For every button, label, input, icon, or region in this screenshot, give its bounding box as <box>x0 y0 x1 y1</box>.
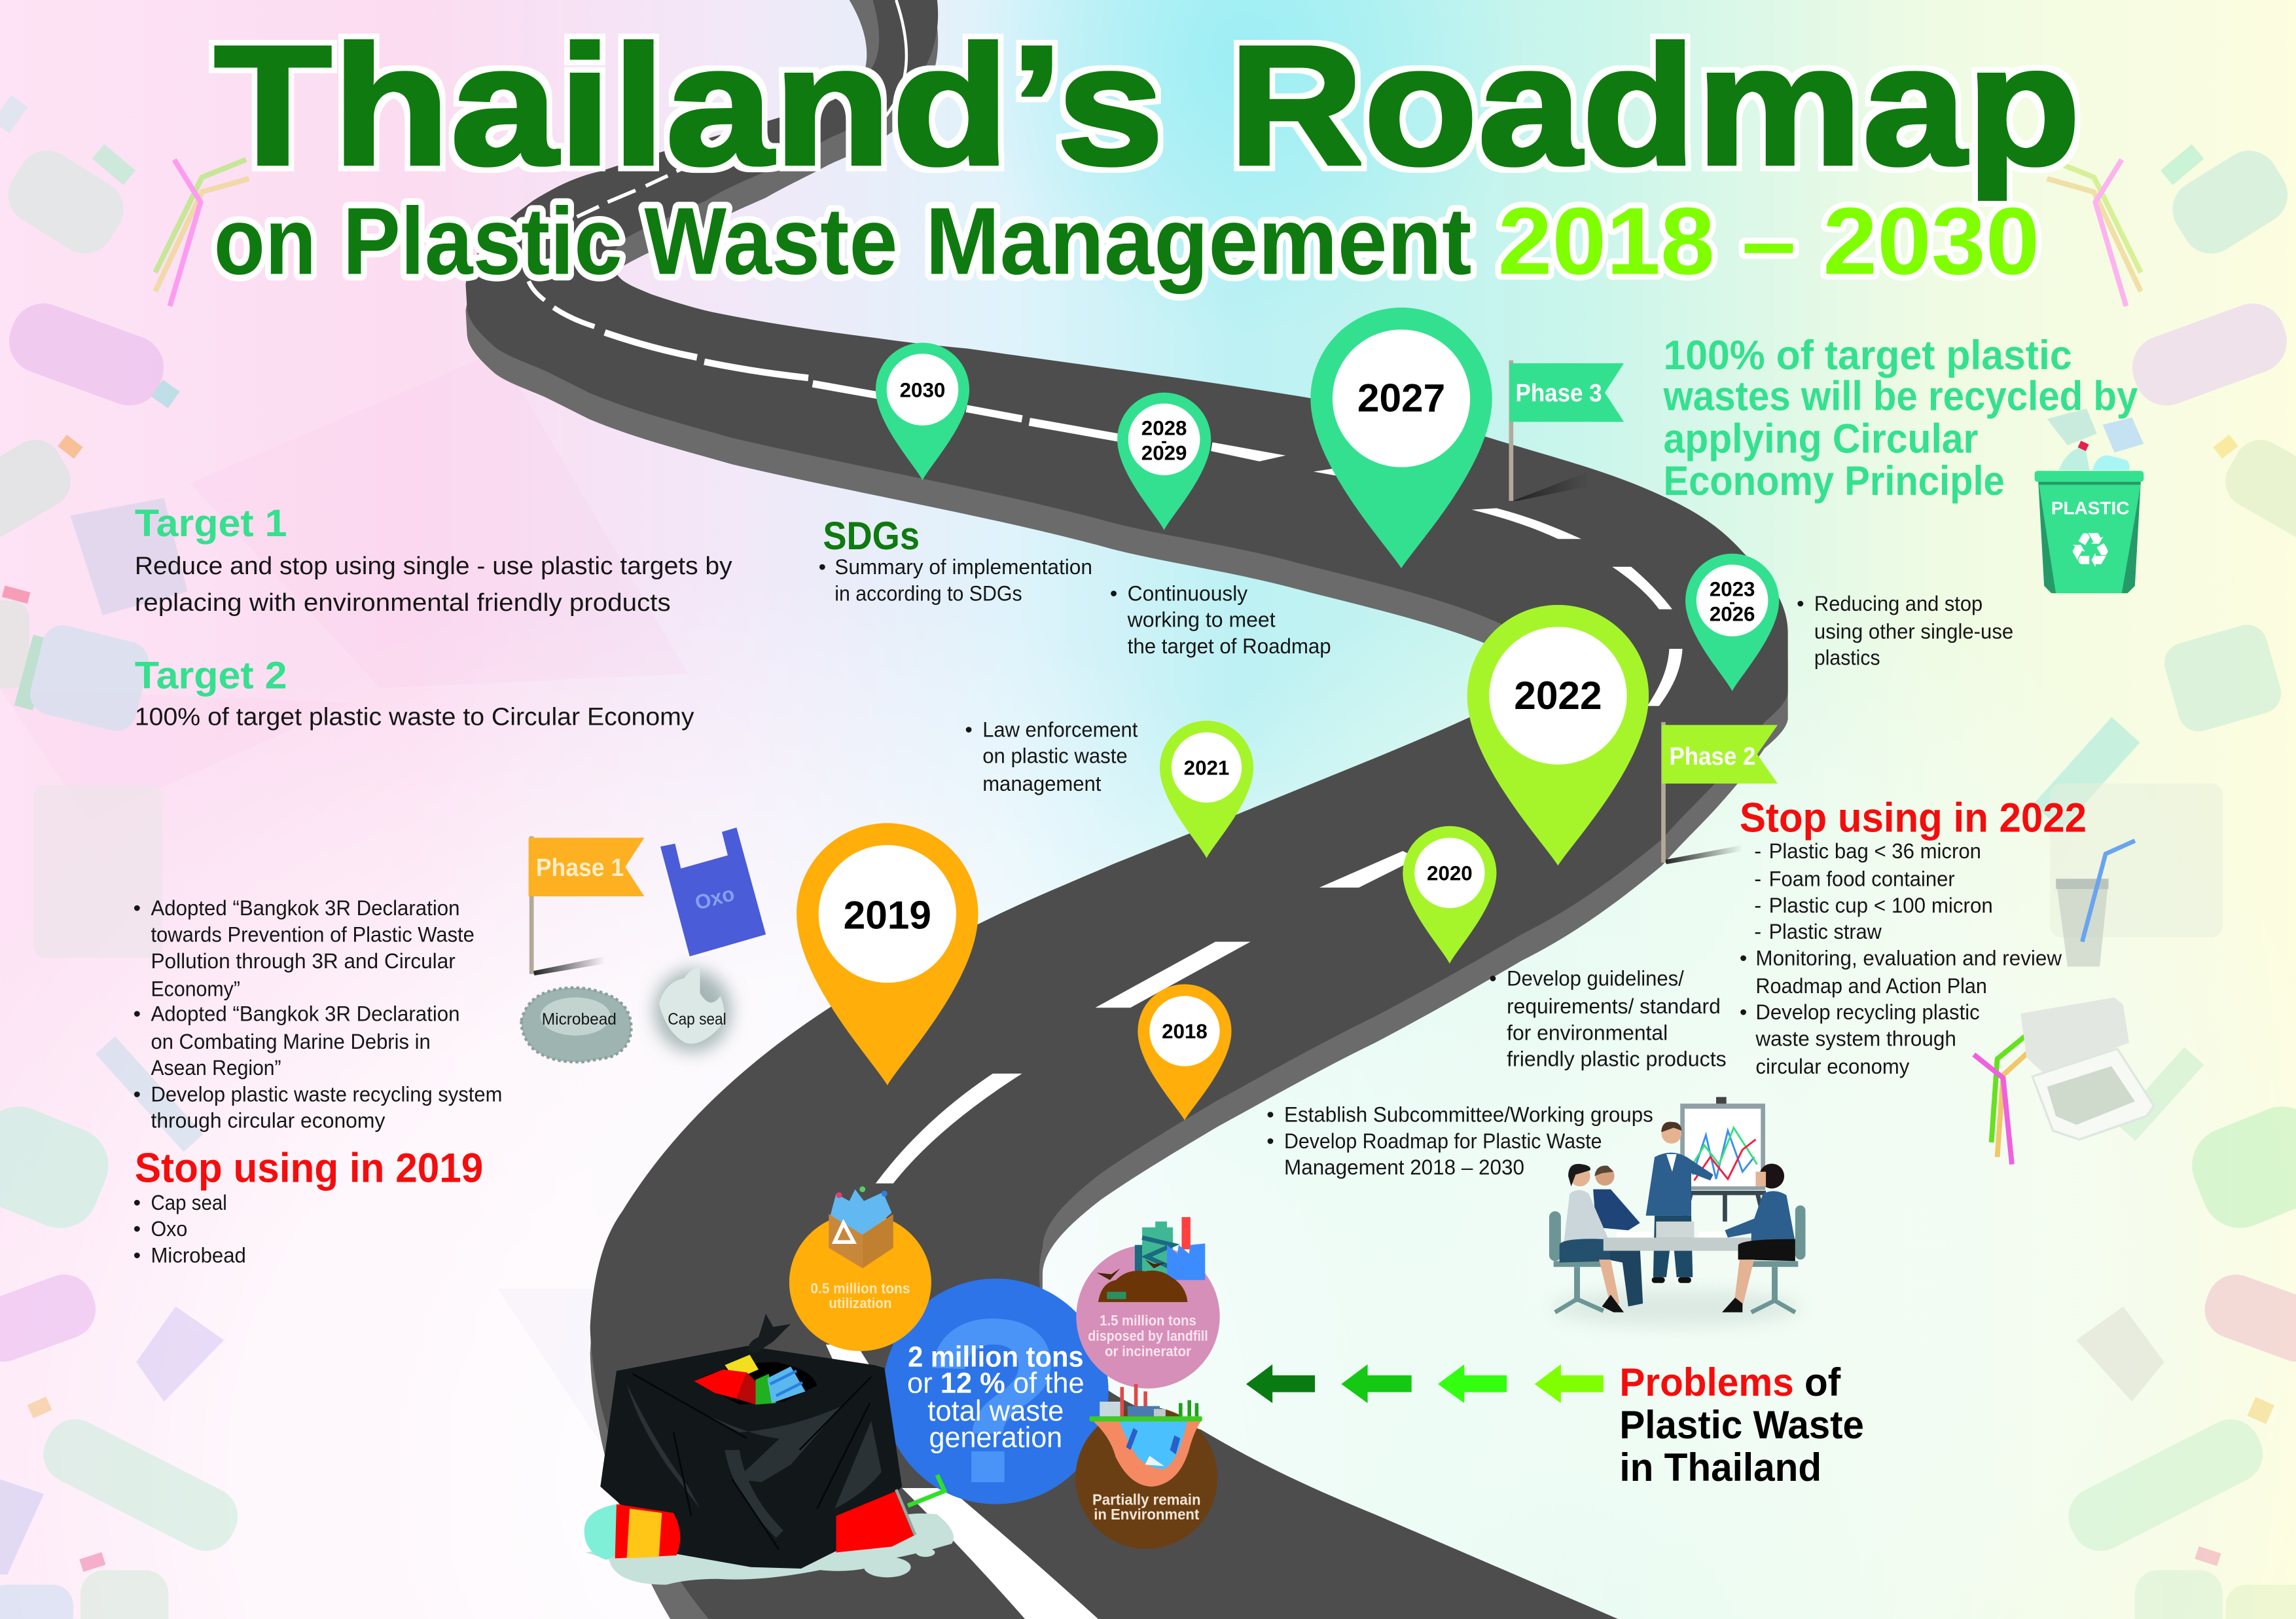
pin 2020 <box>1403 826 1496 964</box>
orange circle: utilization: 0.5 million tons <box>810 1280 910 1296</box>
text block: 2019 actions: on Combating Marine Debris in <box>151 1029 431 1053</box>
text block: stop using in 2022: • <box>1740 945 1747 970</box>
blue circle: 2 million tons: generation <box>929 1421 1062 1453</box>
icon: plastic recycling bin: ♻ <box>2069 522 2112 579</box>
arrow 4 <box>1535 1364 1604 1403</box>
text block: 2023-2026 actions <box>1797 591 2013 670</box>
text block: 2028-2029 actions: working to meet <box>1127 608 1276 632</box>
text block: 2020 actions: Develop guidelines/ <box>1507 966 1685 991</box>
flag: phase 2 <box>1661 722 1778 864</box>
title line 1 <box>214 10 2081 201</box>
text block: 2023-2026 actions: Reducing and stop <box>1814 591 1982 615</box>
pin 2027 <box>1310 308 1492 568</box>
text block: stop using in 2022: circular economy <box>1755 1054 1910 1078</box>
text block: 2021 actions: on plastic waste <box>982 744 1128 768</box>
text block: targets <box>135 502 732 731</box>
faded capsule left <box>0 295 180 414</box>
orange circle: utilization: utilization <box>829 1295 891 1311</box>
flag: phase 3: Phase 3 <box>1516 380 1602 407</box>
flag: phase 3 <box>1509 360 1624 501</box>
text block: 2028-2029 actions: Continuously <box>1128 581 1248 605</box>
pin 2028-2029: 2028 <box>1141 416 1187 439</box>
text block: 2021 actions: management <box>982 771 1101 795</box>
presenter <box>1646 1121 1713 1283</box>
icon: polluted pit and factory <box>1090 1384 1202 1487</box>
icon: microbead pile: Microbead <box>542 1011 617 1028</box>
text block: stop using in 2019: Microbead <box>151 1243 246 1267</box>
text block: 2020 actions: friendly plastic products <box>1507 1047 1727 1071</box>
pin 2028-2029: - <box>1161 431 1167 450</box>
text block: 2019 actions <box>134 896 502 1133</box>
text block: stop using in 2022: - <box>1754 867 1761 891</box>
pin 2018 <box>1138 984 1232 1120</box>
blue circle: 2 million tons: total waste <box>927 1394 1064 1427</box>
icon: faded cup with blue straw <box>2056 841 2135 967</box>
road surface <box>465 0 1788 1619</box>
text block: 2021 actions: Law enforcement <box>982 717 1138 741</box>
pink circle: landfill: 1.5 million tons <box>1100 1313 1196 1329</box>
icon: plastic recycling bin: PLASTIC <box>2051 498 2129 518</box>
text block: stop using in 2022: Stop using in 2022 <box>1740 795 2087 841</box>
heading: problems of plastic waste <box>1619 1360 1864 1489</box>
icon: plastic recycling bin <box>2035 409 2144 593</box>
brown circle: remains in environment <box>1075 1384 1217 1549</box>
icon: oxo plastic bag <box>660 828 766 956</box>
text block: stop using in 2022: Develop recycling plastic <box>1755 1000 1980 1024</box>
icon: oxo plastic bag: Oxo <box>692 882 737 915</box>
text block: 2020 actions <box>1489 966 1727 1071</box>
target 2: Target 2 <box>135 654 287 697</box>
brown circle: remains in environment: Partially remain <box>1092 1491 1201 1508</box>
text block: stop using in 2022: - <box>1754 893 1761 917</box>
title line 2: Plastic <box>343 187 622 294</box>
pin 2023-2026 <box>1685 554 1779 691</box>
arrow 2 <box>1341 1364 1412 1403</box>
text block: targets: 100% of target plastic waste to Circular Economy <box>135 703 694 731</box>
faded plastic waste pattern left <box>0 95 248 1619</box>
pin 2023-2026: 2023 <box>1710 578 1755 601</box>
text block: 2018 actions: Management 2018 – 2030 <box>1284 1155 1524 1179</box>
icon: colored straws right <box>1974 1032 2036 1165</box>
road centre dashes <box>529 0 1683 1619</box>
text block: targets: replacing with environmental friendly products <box>135 589 671 617</box>
road side wall <box>465 26 1788 1619</box>
seated man <box>1593 1166 1643 1307</box>
text block: stop using in 2019: Cap seal <box>151 1190 227 1214</box>
flag: phase 2: Phase 2 <box>1669 743 1755 771</box>
text block: stop using in 2022: - <box>1754 919 1761 943</box>
text block: SDGs: Summary of implementation <box>834 555 1092 579</box>
heading: problems of plastic waste: Plastic Waste <box>1619 1402 1864 1447</box>
text block: 2019 actions: Adopted “Bangkok 3R Declaration <box>151 896 460 920</box>
icon: cap seal: Cap seal <box>668 1011 726 1028</box>
arrows <box>1246 1364 1604 1403</box>
title line 1: Thailand’s <box>214 10 1164 200</box>
text block: stop using in 2019: • <box>134 1216 141 1241</box>
pink circle: landfill: disposed by landfill <box>1088 1328 1208 1344</box>
orange circle: utilization <box>789 1186 931 1351</box>
heading: circular economy target: applying Circular <box>1663 416 1978 462</box>
text block: stop using in 2022: Monitoring, evaluation and review <box>1755 945 2062 970</box>
illustration: meeting at presentation board <box>1549 1097 1806 1327</box>
pin 2027: 2027 <box>1357 376 1445 420</box>
text block: 2023-2026 actions: • <box>1797 591 1804 615</box>
text block: stop using in 2019: Oxo <box>151 1216 187 1241</box>
text block: 2020 actions: requirements/ standard <box>1507 994 1721 1018</box>
text block: stop using in 2022: - <box>1754 839 1761 863</box>
text block: stop using in 2019 <box>134 1145 483 1267</box>
flag: phase 1 <box>529 836 644 975</box>
brown circle: remains in environment: in Environment <box>1094 1506 1200 1523</box>
faded bottle top left <box>0 139 135 264</box>
text block: stop using in 2022: Foam food container <box>1769 867 1955 891</box>
left chair <box>1549 1211 1604 1313</box>
heading: problems of plastic waste: in Thailand <box>1619 1445 1821 1489</box>
pin 2019 <box>797 823 978 1085</box>
arrow 1 <box>1246 1364 1315 1403</box>
text block: 2021 actions <box>965 717 1138 795</box>
text block: stop using in 2022: • <box>1740 1000 1747 1024</box>
text block: 2028-2029 actions: • <box>1110 581 1117 605</box>
text block: SDGs: in according to SDGs <box>834 581 1022 605</box>
bag folds <box>627 1384 882 1538</box>
arrow 3 <box>1438 1364 1507 1403</box>
blue circle: 2 million tons <box>883 1270 1109 1532</box>
text block: stop using in 2022: Plastic bag < 36 micron <box>1769 839 1981 863</box>
text block: 2018 actions: Establish Subcommittee/Working groups <box>1284 1102 1653 1127</box>
text block: 2018 actions: Develop Roadmap for Plastic Waste <box>1284 1129 1602 1153</box>
text block: 2023-2026 actions: using other single-use <box>1814 619 2013 643</box>
icon: cap seal <box>655 967 730 1051</box>
text block: 2019 actions: through circular economy <box>151 1108 386 1133</box>
pin 2021: 2021 <box>1184 756 1229 779</box>
faded bottle with orange cap <box>0 430 83 548</box>
pin 2023-2026: - <box>1729 592 1735 611</box>
winding road <box>465 0 1788 1619</box>
text block: 2019 actions: Develop plastic waste recycling system <box>151 1082 502 1106</box>
text block: 2019 actions: Pollution through 3R and Circular <box>151 949 456 973</box>
pin 2028-2029: 2029 <box>1141 441 1187 464</box>
text block: 2020 actions: • <box>1489 966 1497 991</box>
text block: targets: Reduce and stop using single - use plastic targets by <box>135 553 732 580</box>
pin 2019: 2019 <box>844 892 931 937</box>
blue circle: 2 million tons: or 12 % of the <box>907 1367 1085 1400</box>
text block: 2019 actions: • <box>134 1082 141 1106</box>
icon: food container <box>2020 998 2154 1140</box>
title line 2: on <box>214 187 316 294</box>
right chair <box>1751 1205 1806 1313</box>
text block: stop using in 2019: • <box>134 1190 141 1214</box>
blue circle: 2 million tons: 2 million tons <box>908 1340 1084 1373</box>
pin 2023-2026: 2026 <box>1710 603 1755 626</box>
text block: SDGs <box>819 513 1092 605</box>
text block: 2019 actions: • <box>134 1001 141 1025</box>
bag body <box>600 1346 902 1569</box>
flag: phase 1: Phase 1 <box>536 854 624 882</box>
title line 2 <box>214 187 1471 294</box>
text block: 2023-2026 actions: plastics <box>1814 646 1880 670</box>
heading: problems of plastic waste: Problems of <box>1619 1360 1841 1404</box>
pin 2022 <box>1467 605 1649 865</box>
question mark watermark: ? <box>922 1270 1064 1532</box>
text block: 2018 actions <box>1266 1102 1653 1179</box>
text block: 2019 actions: Asean Region” <box>151 1055 281 1080</box>
heading: circular economy target: Economy Principle <box>1663 458 2005 504</box>
text block: stop using in 2019: • <box>134 1243 141 1267</box>
pin 2021 <box>1160 721 1253 858</box>
heading: circular economy target: wastes will be recycled by <box>1663 373 2138 419</box>
title line 2: Waste <box>644 187 897 294</box>
icon: box of bottles <box>829 1186 893 1268</box>
text block: 2018 actions: • <box>1266 1102 1274 1127</box>
target 1: Target 1 <box>135 502 287 545</box>
bag opening with waste <box>694 1355 817 1404</box>
presentation board <box>1678 1097 1766 1222</box>
pin 2018: 2018 <box>1162 1020 1208 1043</box>
title years: 2018 – 2030 <box>1498 187 2039 294</box>
table with papers <box>1604 1222 1769 1251</box>
bag knot <box>747 1314 791 1353</box>
pink circle: landfill <box>1076 1217 1220 1389</box>
red cup and straw <box>836 1475 944 1552</box>
pin 2030: 2030 <box>900 378 945 401</box>
faded plastic waste pattern right <box>2034 139 2296 1619</box>
text block: stop using in 2022: Plastic cup < 100 micron <box>1769 893 1993 917</box>
text block: 2021 actions: • <box>965 717 973 741</box>
text block: 2019 actions: • <box>134 896 141 920</box>
pin 2030 <box>876 343 969 481</box>
seated woman right <box>1722 1163 1795 1313</box>
text block: 2019 actions: towards Prevention of Plastic Waste <box>151 922 475 947</box>
pin 2028-2029 <box>1117 393 1211 530</box>
plastic bottle <box>584 1504 680 1560</box>
text block: stop using in 2019: Stop using in 2019 <box>135 1145 483 1191</box>
text block: SDGs: • <box>819 555 826 579</box>
title <box>214 10 2081 294</box>
icon: factory and landfill <box>1097 1217 1205 1302</box>
title line 1: Roadmap <box>1229 10 2081 201</box>
heading: circular economy target: 100% of target plastic <box>1663 333 2072 378</box>
faded straws top corners <box>155 160 2141 306</box>
text block: 2028-2029 actions <box>1110 581 1331 658</box>
pink circle: landfill: or incinerator <box>1105 1343 1191 1360</box>
text block: stop using in 2022 <box>1740 795 2087 1078</box>
pin 2022: 2022 <box>1514 673 1602 718</box>
pin 2020: 2020 <box>1427 862 1473 885</box>
text block: 2028-2029 actions: the target of Roadmap <box>1128 634 1331 658</box>
puddle <box>586 1514 954 1585</box>
title line 2: Management <box>925 187 1471 294</box>
icon: microbead pile <box>521 988 631 1062</box>
text block: 2019 actions: Economy” <box>151 976 240 1000</box>
text block: 2020 actions: for environmental <box>1507 1020 1668 1044</box>
text block: stop using in 2022: Roadmap and Action Plan <box>1755 973 1987 998</box>
text block: 2019 actions: Adopted “Bangkok 3R Declaration <box>151 1001 460 1025</box>
seated woman left <box>1560 1164 1624 1313</box>
text block: 2018 actions: • <box>1266 1129 1274 1153</box>
text block: SDGs: SDGs <box>823 513 920 558</box>
illustration: garbage bag with plastic waste <box>584 1314 954 1585</box>
text block: stop using in 2022: Plastic straw <box>1769 919 1882 943</box>
heading: circular economy target <box>1663 333 2138 504</box>
text block: stop using in 2022: waste system through <box>1755 1026 1956 1050</box>
